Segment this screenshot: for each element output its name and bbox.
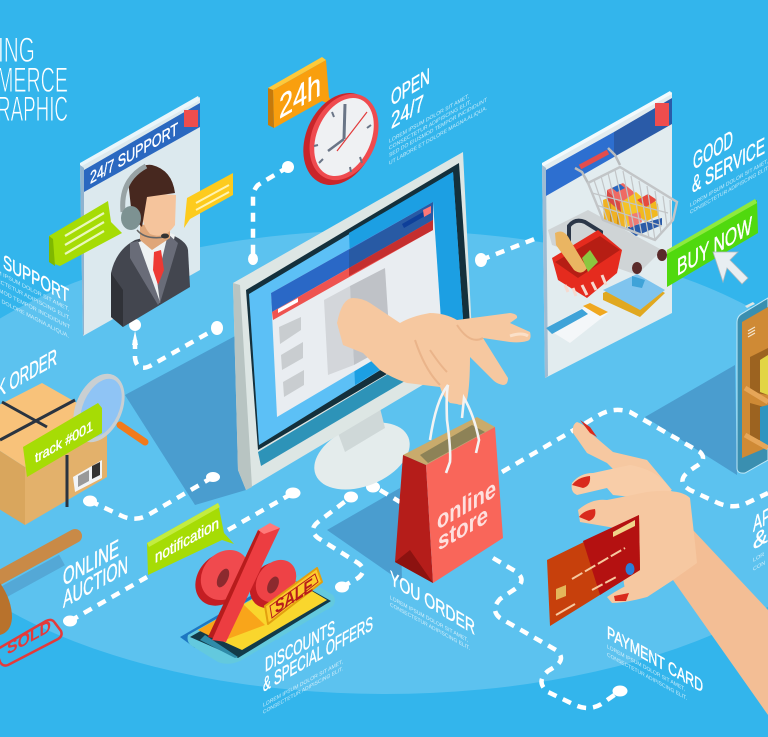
panel: 24/7 support: [49, 96, 233, 336]
icon: cart tray: [548, 210, 662, 275]
label: open 24/7: 24/7: [391, 90, 424, 135]
discounts body text: LOREM IPSUM DOLOR SIT AMET,: [263, 659, 343, 709]
title: [0, 31, 68, 129]
discounts body text: CONSECTETUR ADIPISCING ELIT.: [263, 666, 343, 716]
label: apps (cropped): CON: [753, 560, 765, 573]
label: apps (cropped): LOR: [753, 552, 764, 564]
label: you order: YOU ORDER: [390, 566, 475, 640]
heading: 24/7 support: 24/7 SUPPORT: [90, 118, 178, 188]
label: track order: K ORDER: [0, 344, 57, 404]
label: apps (cropped): [753, 502, 768, 573]
platform ellipse: [0, 230, 768, 694]
icon: percent sign: [185, 523, 305, 642]
payment card: [547, 515, 640, 626]
icon: cursor arrow: [713, 252, 748, 284]
icon: yellow speech bubble: [184, 173, 233, 228]
open body text: UT LABORE ET DOLORE MAGNA ALIQUA.: [389, 105, 487, 167]
tag: track #001: track #001: [35, 418, 93, 467]
floor shadows: [125, 335, 737, 582]
bag label: online: [437, 474, 496, 536]
icon: green speech bubble: [49, 201, 122, 266]
monitor: [233, 152, 473, 503]
tablet: [737, 298, 768, 473]
icon: gavel: [0, 536, 75, 635]
open body text: CONSECTETUR ADIPISCING ELIT,: [389, 99, 471, 152]
parcel box: [0, 383, 107, 525]
label: online auction: [63, 535, 128, 614]
icon: red basket: [552, 221, 622, 298]
icon: wall clock: [289, 81, 392, 197]
panel: goods and service: [542, 91, 677, 378]
label: support: SUPPORT: [3, 250, 69, 308]
icon: phone: [180, 575, 335, 664]
label: online auction: AUCTION: [63, 552, 128, 614]
shopping bag: [395, 385, 503, 583]
title: RAPHIC: [0, 90, 68, 129]
payment card body text: CONSECTETUR ADIPISCING ELIT.: [607, 652, 687, 702]
dashed connector paths: [63, 161, 768, 708]
you order body text: CONSECTETUR ADIPISCING ELIT.: [390, 602, 470, 652]
label: open 24/7: [389, 63, 487, 167]
icon: support agent: [111, 165, 190, 327]
label: support: [0, 250, 70, 340]
title: MERCE: [0, 61, 68, 100]
tag: sale: SALE: [275, 574, 313, 619]
label: discounts and special offers: [263, 611, 373, 716]
monitor stand: [304, 400, 420, 503]
label: payment card: PAYMENT CARD: [607, 622, 703, 697]
label: discounts and special offers: & SPECIAL OFFERS: [263, 611, 373, 697]
icon: folded shirt: [603, 274, 665, 317]
label: online auction: ONLINE: [63, 535, 119, 592]
label: payment card: [607, 622, 703, 702]
bag label: store: [438, 500, 488, 557]
icon: 24h sign: 24h: [279, 65, 321, 126]
icon: shopping cart: [575, 148, 677, 240]
stamp: sold: [0, 615, 62, 666]
you order body text: LOREM IPSUM DOLOR SIT AMET,: [390, 595, 468, 644]
label: discounts and special offers: DISCOUNTS: [265, 616, 335, 677]
stamp: sold: SOLD: [7, 615, 51, 659]
web page on screen: [271, 202, 441, 417]
support body text: [0, 268, 70, 340]
bag handles: [430, 385, 479, 473]
tag: track #001: [23, 403, 102, 477]
label: you order: [390, 566, 475, 652]
cart contents: [603, 183, 662, 236]
open body text: SED DO EIUSMOD TEMPOR INCIDIDUNT: [389, 97, 487, 159]
payment card body text: LOREM IPSUM DOLOR SIT AMET,: [607, 644, 685, 693]
icon: ticket: [546, 303, 608, 343]
icon: magnifying glass: [63, 366, 145, 450]
tag: sale: [265, 568, 322, 624]
barcode label: [73, 460, 102, 492]
nails: [572, 420, 629, 601]
pinky finger over card: [607, 565, 680, 603]
hand reaching from screen: [337, 298, 531, 405]
label: good and service: GOOD: [693, 124, 733, 176]
label: apps (cropped): &: [753, 522, 768, 556]
label: open 24/7: OPEN: [391, 63, 430, 112]
label: good and service: [690, 124, 768, 216]
button: buy now: [667, 199, 758, 287]
open body text: LOREM IPSUM DOLOR SIT AMET,: [389, 94, 469, 145]
arm holding card: [572, 422, 768, 715]
bubble: notification: notification: [155, 513, 219, 567]
